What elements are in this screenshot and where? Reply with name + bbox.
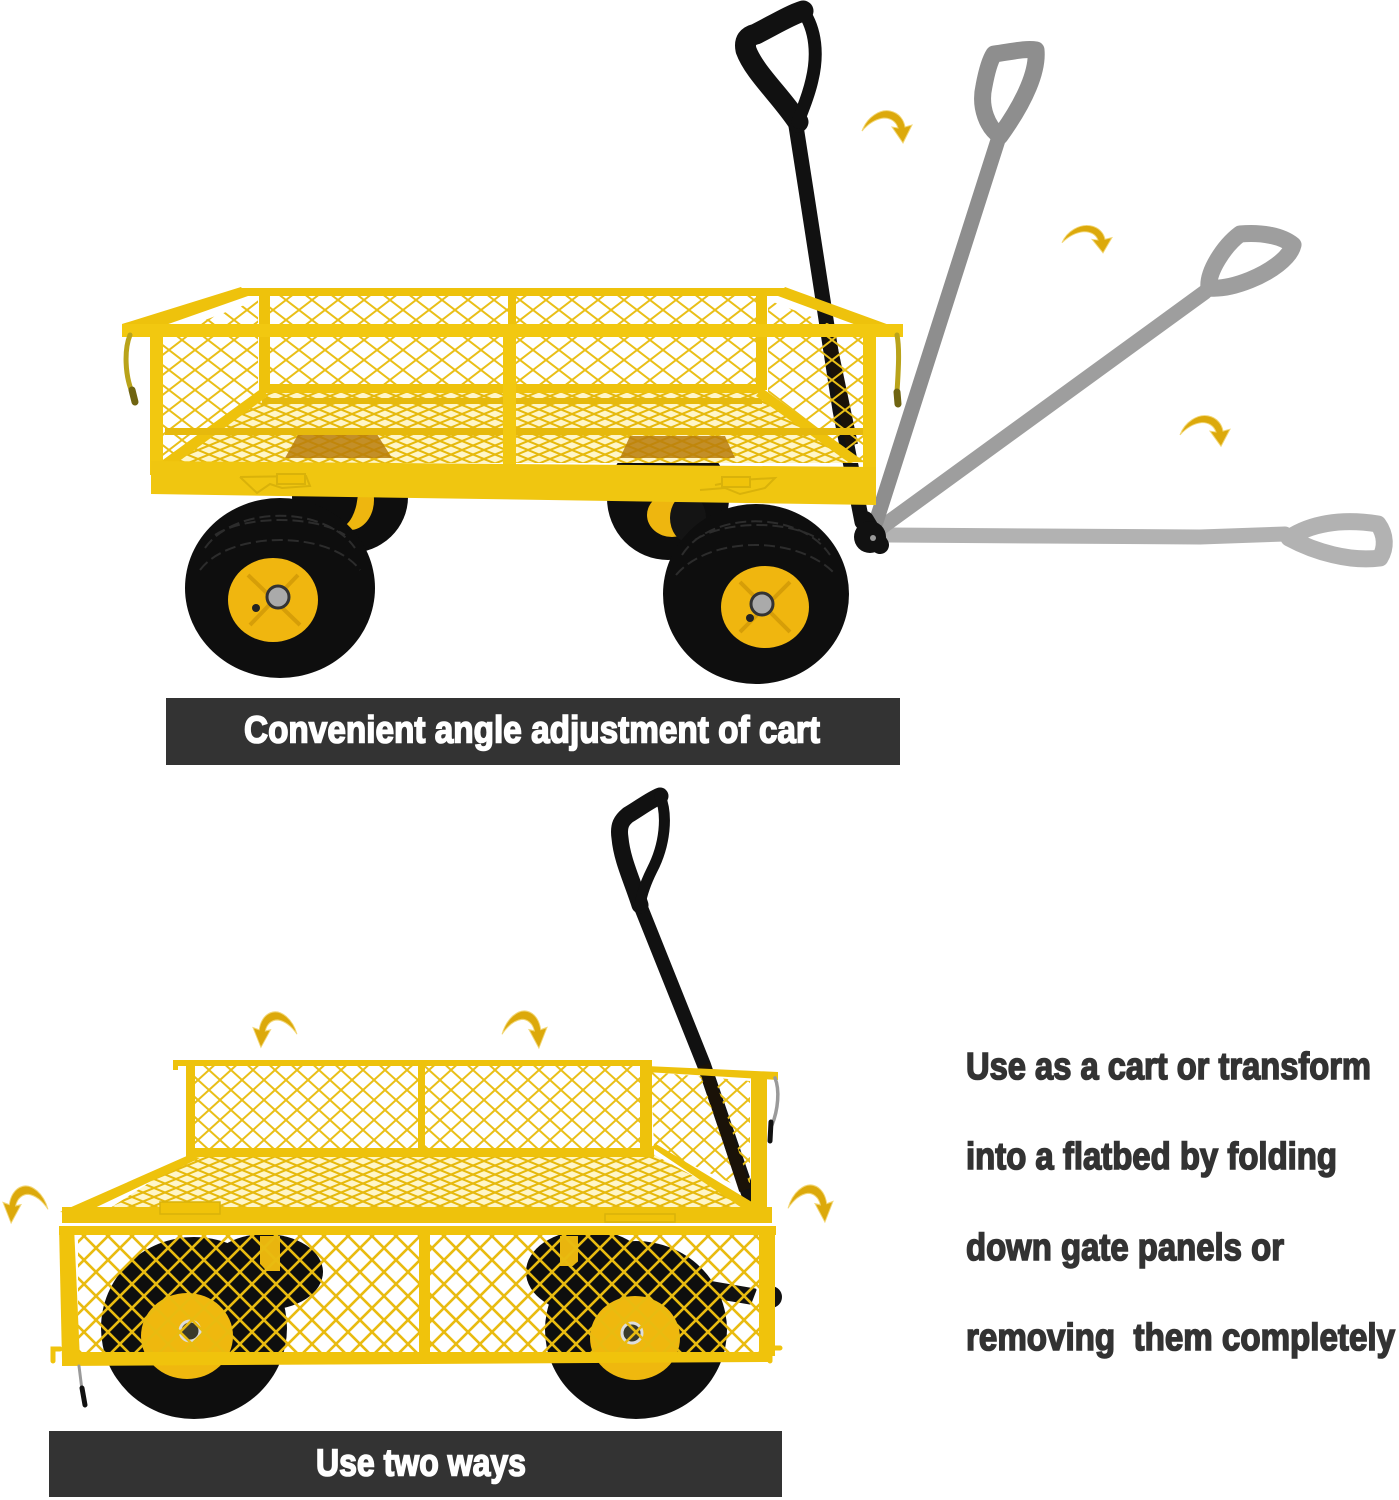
caption bar: top [166,698,900,765]
arrow right [788,1185,833,1222]
top cart front left wheel [185,498,375,678]
top cart rear wheels [292,436,729,560]
line 2: into a flatbed by folding [966,1136,1337,1178]
caption text: Use two ways [316,1442,526,1484]
left side mesh [160,300,258,462]
floor mesh [162,390,865,463]
front right wheel [545,1241,727,1419]
back mesh panel [268,296,758,386]
rotation arrows: bottom cart [3,1011,833,1223]
bottom cart handle [619,796,782,1308]
gate hooks [53,1348,780,1361]
rear right wheel [607,436,729,560]
caption bar: bottom [49,1431,782,1497]
rotation arrows: top cart [862,111,1230,446]
rear right wheel [526,1230,650,1314]
caption text: Convenient angle adjustment of cart [244,710,820,752]
bottom cart front gate folded down [53,1226,780,1405]
back mesh [194,1066,641,1150]
side hooks [126,335,899,404]
bottom cart rear panel and floor [60,1060,778,1223]
black shaft behind right mesh [828,330,852,445]
right side mesh [768,300,863,462]
arrow left [3,1186,48,1223]
tread [200,516,360,570]
gray handle: fully lowered position [885,522,1384,559]
side rails [122,287,903,462]
floor mesh [110,1153,752,1208]
right side mesh [651,1072,750,1192]
line 3: down gate panels or [966,1227,1284,1269]
hub [228,558,318,642]
description text block [966,1046,1395,1359]
gray handle: mid angle position [876,49,1036,522]
pull pin [79,1366,85,1405]
wheel shadows through floor [285,431,735,458]
arrow top right [502,1011,547,1048]
front left wheel [101,1237,287,1419]
latches [240,474,775,494]
front frame [122,324,903,505]
side hook [770,1078,778,1141]
gate frame [59,1226,776,1366]
gate mesh [78,1234,760,1352]
black handle: upright position [745,11,886,553]
rear left wheel [207,1234,323,1310]
arrow 2 [1062,225,1112,253]
latches [160,1202,675,1222]
top cart basket [122,287,903,505]
back frame [241,288,785,404]
back frame [173,1060,654,1157]
shaft behind right mesh [704,1065,745,1190]
tread [676,521,836,575]
floor rim [60,1155,772,1223]
gray handle: low angle position [882,233,1293,527]
side frame right [646,1066,778,1212]
arrow 3 [1180,416,1230,446]
arrow top left [253,1012,297,1047]
top cart front right wheel [663,504,849,684]
hub [721,566,809,648]
rear left wheel [292,441,408,553]
arrow 1 [862,111,912,143]
bottom cart wheels [101,1230,727,1419]
